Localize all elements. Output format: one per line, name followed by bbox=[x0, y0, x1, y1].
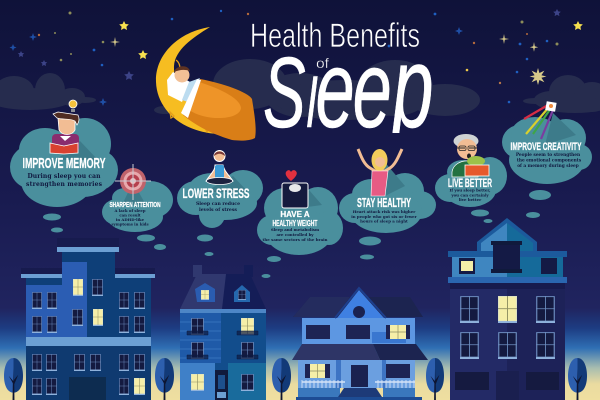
icon: target bbox=[115, 164, 151, 205]
building: suburban house bbox=[292, 288, 428, 400]
body text: in people who got six or fewer bbox=[351, 214, 418, 219]
body text bbox=[26, 173, 103, 188]
heading: IMPROVE MEMORY bbox=[22, 156, 106, 172]
sheet edge bbox=[181, 79, 201, 118]
stars bbox=[10, 9, 583, 106]
body text: you can certainly bbox=[450, 192, 489, 198]
trees bbox=[4, 358, 587, 400]
panel: live better bbox=[435, 134, 507, 207]
blue sheet bbox=[182, 78, 200, 102]
dark clouds bbox=[0, 59, 600, 120]
title: l bbox=[307, 65, 318, 142]
body text bbox=[450, 188, 490, 202]
body text: can result bbox=[119, 212, 141, 218]
heading: HAVE A bbox=[280, 210, 310, 219]
body text: in ADHD-like bbox=[116, 217, 145, 222]
panel: lower stress bbox=[177, 150, 263, 228]
building: townhouse bbox=[180, 265, 266, 400]
body text bbox=[196, 201, 240, 213]
building: apartment block left bbox=[21, 238, 155, 400]
title bbox=[252, 22, 432, 133]
heading: HEALTHY WEIGHT bbox=[272, 218, 318, 228]
head bbox=[174, 68, 190, 82]
icon: coloured pencils bbox=[524, 101, 576, 145]
body text: the emotional components bbox=[517, 158, 582, 164]
cloud bbox=[435, 157, 507, 207]
crescent moon bbox=[156, 27, 226, 134]
body text: levels of stress bbox=[199, 207, 237, 213]
panel: improve creativity bbox=[502, 101, 592, 184]
panel: improve memory bbox=[10, 100, 118, 207]
body text: of a memory during sleep bbox=[517, 164, 579, 169]
body text: symptoms in kids bbox=[111, 222, 149, 226]
cloud bbox=[257, 187, 343, 255]
body text: If you sleep better, bbox=[450, 188, 490, 192]
title: S bbox=[263, 36, 306, 148]
title: e bbox=[315, 27, 355, 151]
body text: Heart attack risk was higher bbox=[353, 209, 416, 214]
heading: STAY HEALTHY bbox=[357, 196, 411, 210]
panel: stay healthy bbox=[339, 149, 436, 233]
body text: the same sectors of the brain bbox=[262, 237, 328, 242]
heading: SHARPEN ATTENTION bbox=[110, 202, 160, 209]
body text: Sleep can reduce bbox=[196, 201, 240, 207]
icon: woman meditating bbox=[205, 150, 248, 192]
moon with sleeping man bbox=[156, 27, 256, 141]
body text: live better bbox=[459, 197, 482, 202]
cloud bbox=[10, 118, 118, 207]
body text: are controlled by bbox=[276, 232, 314, 237]
body text: hours of sleep a night bbox=[360, 218, 408, 224]
body text: During sleep you can bbox=[28, 173, 101, 180]
heading: LOWER STRESS bbox=[182, 185, 250, 201]
heading: LIVE BETTER bbox=[448, 176, 492, 190]
building: tall house right bbox=[448, 218, 567, 400]
body text: Sleep and metabolism bbox=[271, 227, 320, 232]
panel: have a healthy weight bbox=[257, 170, 343, 255]
cloud bbox=[339, 173, 436, 233]
icon: old man with flower box bbox=[452, 134, 489, 177]
body text: strengthen memories bbox=[26, 181, 103, 188]
icon: man reading with light bulb bbox=[50, 100, 98, 160]
icon: woman raising arms bbox=[358, 149, 405, 196]
body text bbox=[262, 227, 328, 242]
icon: heart and scale bbox=[282, 170, 322, 208]
heading bbox=[272, 210, 318, 228]
cloud bbox=[102, 181, 173, 232]
blanket bbox=[183, 79, 256, 141]
title: p bbox=[390, 22, 434, 152]
cloud bbox=[177, 170, 263, 228]
body text bbox=[351, 209, 418, 224]
pillow bbox=[167, 72, 190, 102]
body text: A lack of sleep bbox=[114, 208, 146, 213]
panel: sharpen attention bbox=[102, 164, 173, 232]
thought bubbles bbox=[43, 190, 551, 278]
body text bbox=[516, 153, 582, 169]
body text bbox=[111, 208, 149, 226]
cloud bbox=[502, 117, 592, 184]
title: e bbox=[353, 27, 392, 151]
title: Health Benefits bbox=[250, 17, 420, 55]
body text: People seem to strengthen bbox=[516, 153, 581, 158]
title: of bbox=[316, 55, 329, 71]
